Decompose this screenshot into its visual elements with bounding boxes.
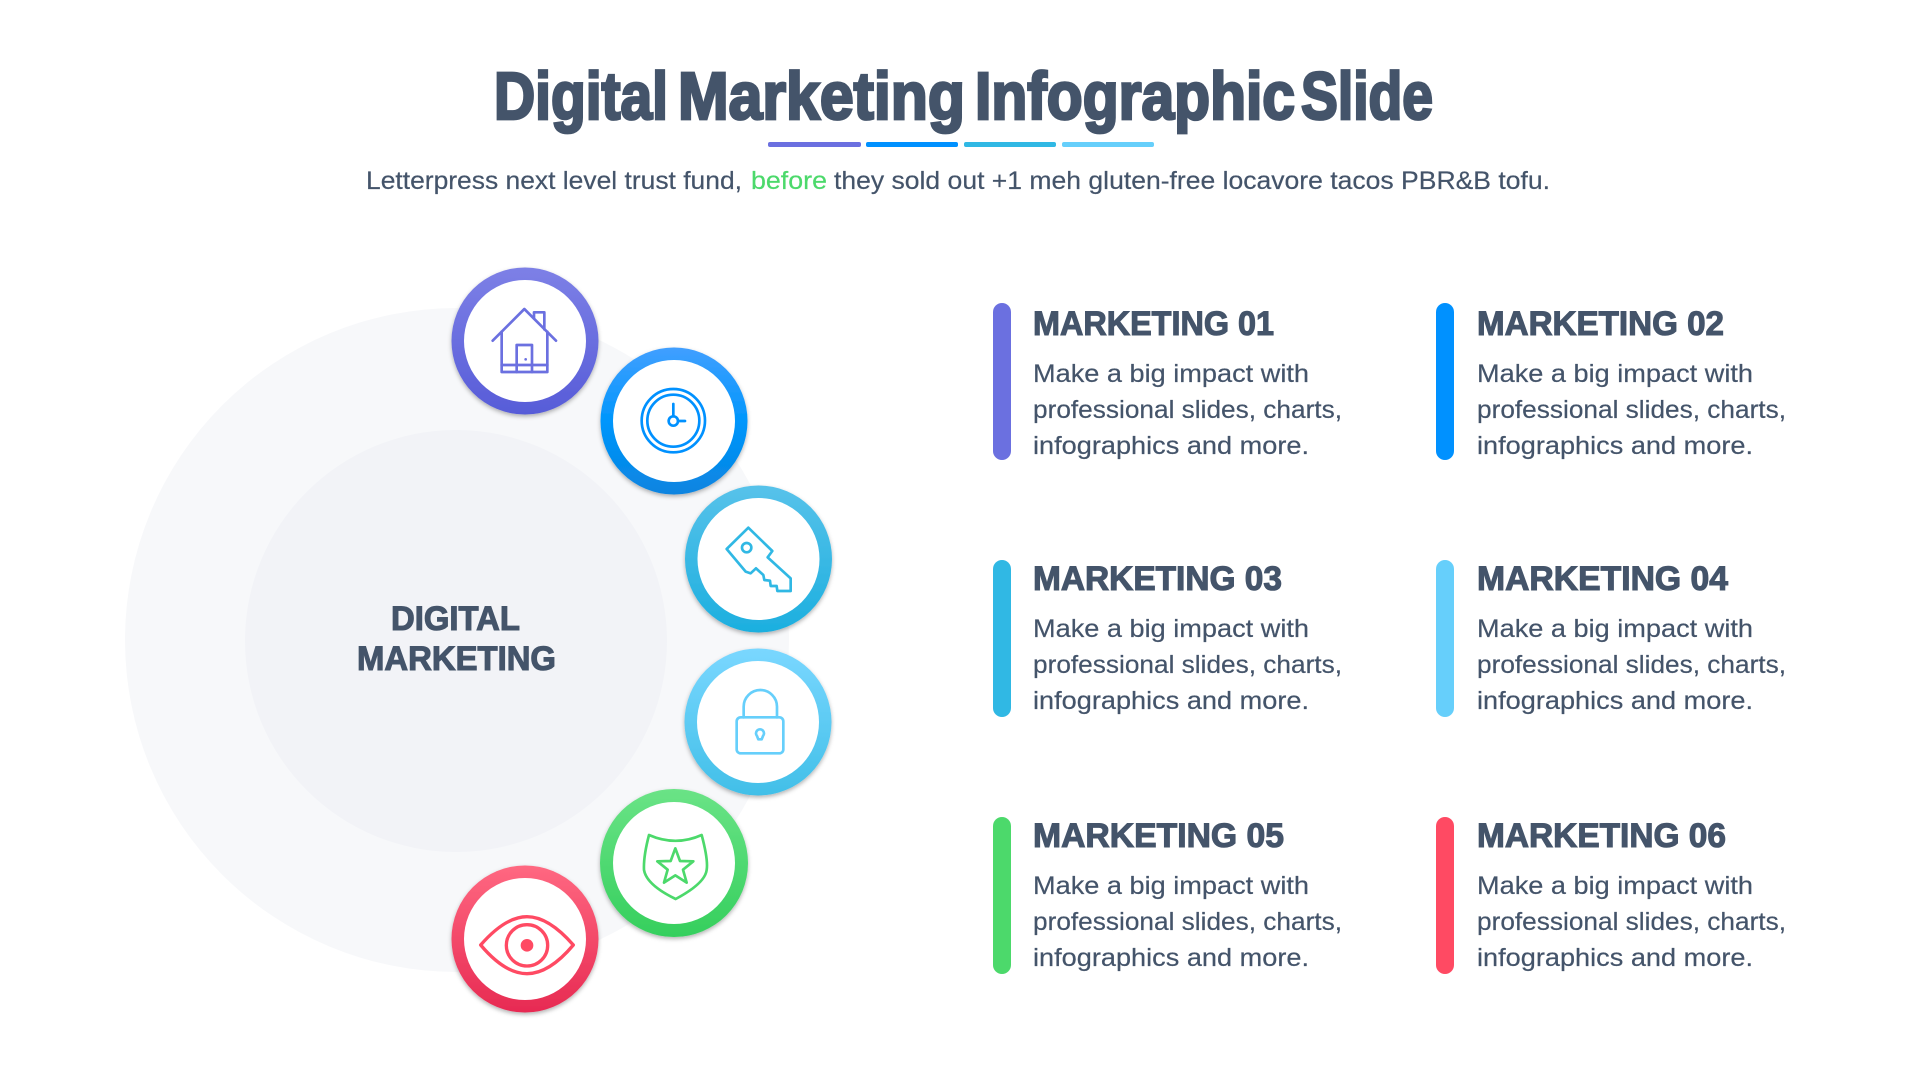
- panel: marketing 02: MARKETING 02: [1477, 305, 1724, 343]
- panel: marketing 04: Make a big impact with: [1477, 615, 1753, 643]
- icon: key badge: [685, 486, 832, 632]
- panel: marketing 03: MARKETING 03: [1033, 560, 1282, 598]
- icon: eye badge: [452, 866, 598, 1012]
- subtitle: before: [751, 167, 827, 195]
- panel: marketing 06: infographics and more.: [1477, 944, 1753, 972]
- panel: marketing 04: professional slides, charts,: [1477, 651, 1786, 679]
- icon: shield star badge: [600, 789, 748, 937]
- inner hub: digital marketing: MARKETING: [357, 640, 556, 678]
- panel: marketing 06: MARKETING 06: [1477, 817, 1726, 855]
- panel: marketing 01: [993, 303, 1342, 460]
- panel: marketing 01: professional slides, charts,: [1033, 396, 1342, 424]
- panel: marketing 04: infographics and more.: [1477, 687, 1753, 715]
- panel: marketing 04: [1436, 560, 1786, 717]
- title underline: [768, 142, 1154, 147]
- panel: marketing 02: professional slides, charts,: [1477, 396, 1786, 424]
- outer background circle: [125, 308, 789, 972]
- panel: marketing 02: [1436, 303, 1786, 460]
- panel: marketing 05: Make a big impact with: [1033, 872, 1309, 900]
- panel: marketing 01: infographics and more.: [1033, 432, 1309, 460]
- panel: marketing 06: Make a big impact with: [1477, 872, 1753, 900]
- panel: marketing 02: Make a big impact with: [1477, 360, 1753, 388]
- panel: marketing 01: Make a big impact with: [1033, 360, 1309, 388]
- panel: marketing 03: infographics and more.: [1033, 687, 1309, 715]
- title: Slide: [1301, 59, 1433, 134]
- icon: house badge: [452, 268, 598, 414]
- subtitle: they sold out +1 meh gluten-free locavore tacos PBR&B tofu.: [834, 167, 1550, 195]
- panel: marketing 06: [1436, 817, 1786, 974]
- icon: clock badge: [600, 348, 748, 494]
- panel: marketing 05: MARKETING 05: [1033, 817, 1284, 855]
- panel: marketing 05: professional slides, charts,: [1033, 908, 1342, 936]
- panel: marketing 02: infographics and more.: [1477, 432, 1753, 460]
- panel: marketing 06: professional slides, charts,: [1477, 908, 1786, 936]
- icon: padlock badge: [684, 648, 832, 796]
- inner hub: digital marketing: DIGITAL: [391, 600, 520, 638]
- panel: marketing 01: MARKETING 01: [1033, 305, 1274, 343]
- panel: marketing 03: professional slides, charts,: [1033, 651, 1342, 679]
- inner hub: digital marketing: [245, 430, 667, 852]
- subtitle: Letterpress next level trust fund,: [366, 167, 742, 195]
- panel: marketing 04: MARKETING 04: [1477, 560, 1728, 598]
- title: Marketing: [678, 59, 965, 134]
- title: Digital: [494, 59, 668, 134]
- panel: marketing 05: [993, 817, 1342, 974]
- panel: marketing 03: Make a big impact with: [1033, 615, 1309, 643]
- panel: marketing 03: [993, 560, 1342, 717]
- panel: marketing 05: infographics and more.: [1033, 944, 1309, 972]
- title: Infographic: [975, 59, 1295, 134]
